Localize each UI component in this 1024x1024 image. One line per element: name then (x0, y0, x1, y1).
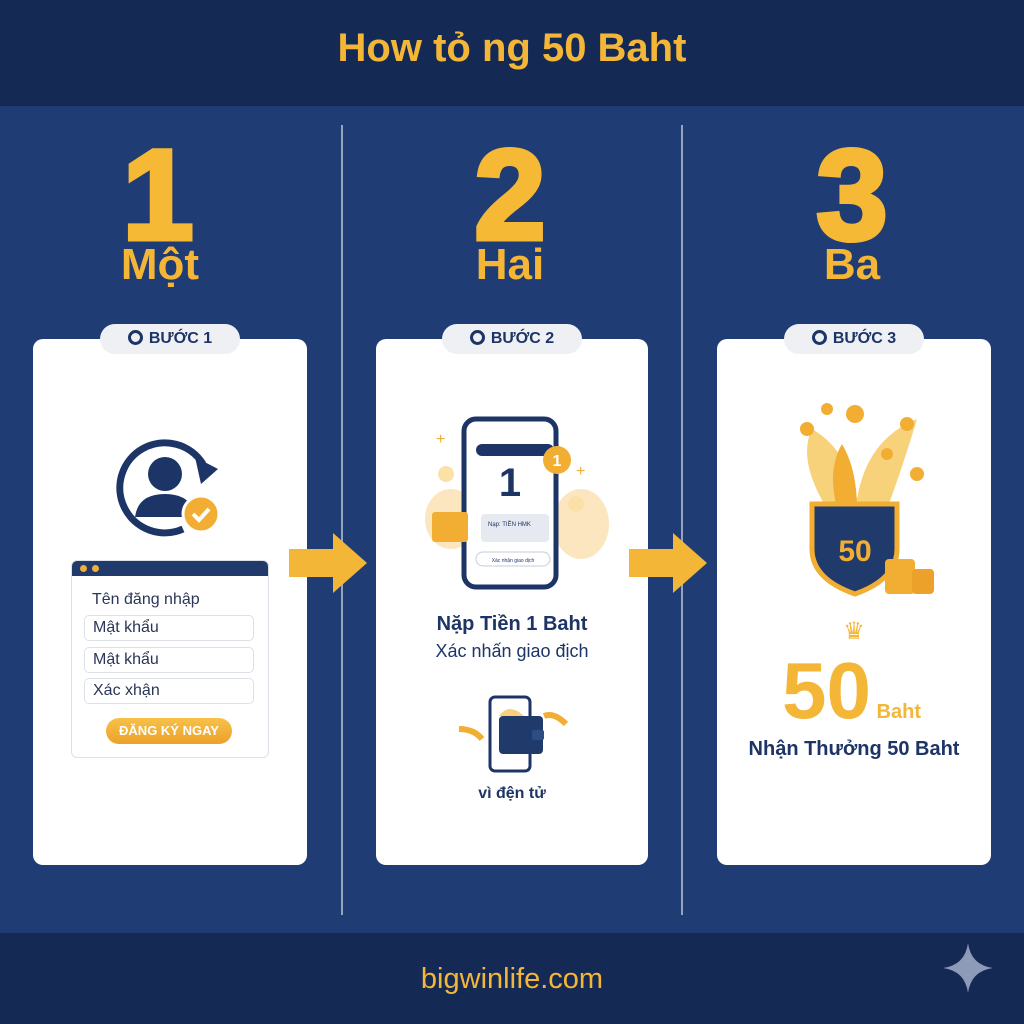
arrow 2 (629, 533, 707, 593)
icon: user refresh (116, 439, 218, 536)
step number 2: 2 (474, 124, 546, 267)
arrow 1 (289, 533, 367, 593)
badge: step 3 (784, 324, 924, 354)
panel: step 3 card (717, 339, 991, 865)
badge: step 1 (100, 324, 240, 354)
badge: step 1: BƯỚC 1 (149, 330, 212, 347)
badge: step 3: BƯỚC 3 (833, 330, 896, 347)
badge: step 2: BƯỚC 2 (491, 330, 554, 347)
text: receive reward: Nhận Thưởng 50 Baht (749, 738, 959, 760)
login form (71, 560, 269, 758)
title: How tỏ ng 50 Baht (338, 26, 686, 70)
panel: step 1 card (33, 339, 307, 865)
panel: step 2 card: Xác nhấn giao địch (435, 641, 589, 661)
footer url: bigwinlife.com (421, 963, 603, 995)
icon: phone deposit: 1 (499, 461, 521, 505)
icon: shield coins (800, 403, 934, 597)
step label 1: Một (121, 240, 199, 289)
icon: phone deposit (425, 416, 609, 590)
icon: phone deposit: Xác nhận giao dịch (492, 558, 534, 564)
icon: wallet phone (459, 696, 568, 772)
header bar (0, 0, 1024, 106)
icon: shield coins: 50 (838, 535, 872, 568)
icon: phone deposit: + (576, 463, 585, 480)
label: e-wallet: vì đện tử (478, 785, 546, 802)
icon: phone deposit: + (436, 431, 445, 448)
icon: phone deposit: 1 (553, 453, 562, 470)
step number 1: 1 (122, 124, 194, 267)
step number 3: 3 (816, 124, 888, 267)
icon: crown: ♛ (843, 618, 865, 645)
login form: Mật khẩu (93, 619, 159, 636)
icon: phone deposit: Nạp: TIỀN HMK (488, 521, 531, 528)
panel: step 2 card (376, 339, 648, 865)
login form: Tên đăng nhập (92, 591, 200, 608)
badge: step 2 (442, 324, 582, 354)
button (106, 718, 232, 744)
text: deposit: Nặp Tiền 1 Baht (437, 613, 587, 635)
amount 50 Baht: 50 Baht (782, 646, 921, 735)
step label 3: Ba (824, 240, 880, 289)
footer bar (0, 933, 1024, 1024)
login form: Xác xhận (93, 682, 160, 699)
button: ĐĂNG KÝ NGAY (119, 723, 219, 738)
icon: sparkle (943, 943, 993, 993)
login form: Mật khẩu (93, 651, 159, 668)
step label 2: Hai (476, 240, 544, 289)
